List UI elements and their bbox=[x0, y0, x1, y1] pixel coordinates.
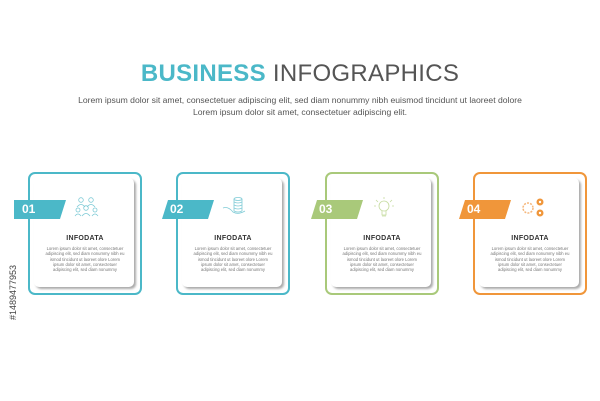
card 3 bbox=[325, 172, 439, 295]
heading: INFODATA bbox=[511, 235, 549, 242]
card 1: 01 bbox=[22, 202, 35, 216]
subtitle bbox=[78, 95, 522, 117]
heading: INFODATA bbox=[363, 235, 401, 242]
card 4 bbox=[473, 172, 587, 295]
subtitle: Lorem ipsum dolor sit amet, consectetuer adipiscing elit, sed diam nonummy nibh euismod tincidunt ut laoreet dolore bbox=[78, 95, 522, 105]
text: Lorem ipsum dolor sit amet, consectetuer adipiscing elit, sed diam nonummy nibh eu ismod tincidunt ut laoreet olore Lorem ipsum dolor sit amet, consectetuer adipiscing elit, sed diam nonummy bbox=[491, 246, 569, 272]
icon: people bbox=[74, 197, 98, 216]
title: BUSINESS INFOGRAPHICS bbox=[141, 60, 459, 87]
card 2: 02 bbox=[170, 202, 183, 216]
icon: coins in hand bbox=[222, 197, 246, 214]
card 1 bbox=[28, 172, 142, 295]
tag 04 bbox=[459, 200, 511, 219]
icon: bulb bbox=[374, 197, 394, 216]
text: Lorem ipsum dolor sit amet, consectetuer adipiscing elit, sed diam nonummy nibh eu ismod tincidunt ut laoreet olore Lorem ipsum dolor sit amet, consectetuer adipiscing elit, sed diam nonummy bbox=[194, 246, 272, 272]
tag 03 bbox=[311, 200, 363, 219]
tag 02 bbox=[162, 200, 214, 219]
heading: INFODATA bbox=[66, 235, 104, 242]
tag 01 bbox=[14, 200, 66, 219]
text: Lorem ipsum dolor sit amet, consectetuer adipiscing elit, sed diam nonummy nibh eu ismod tincidunt ut laoreet olore Lorem ipsum dolor sit amet, consectetuer adipiscing elit, sed diam nonummy bbox=[46, 246, 124, 272]
card 2 bbox=[176, 172, 290, 295]
icon: gears bbox=[522, 198, 544, 216]
heading: INFODATA bbox=[214, 235, 252, 242]
subtitle: Lorem ipsum dolor sit amet, consectetuer adipiscing elit. bbox=[193, 107, 407, 117]
watermark id: #1489477953 bbox=[8, 265, 18, 320]
text: Lorem ipsum dolor sit amet, consectetuer adipiscing elit, sed diam nonummy nibh eu ismod tincidunt ut laoreet olore Lorem ipsum dolor sit amet, consectetuer adipiscing elit, sed diam nonummy bbox=[343, 246, 421, 272]
card 3: 03 bbox=[319, 202, 332, 216]
card 4: 04 bbox=[467, 202, 480, 216]
